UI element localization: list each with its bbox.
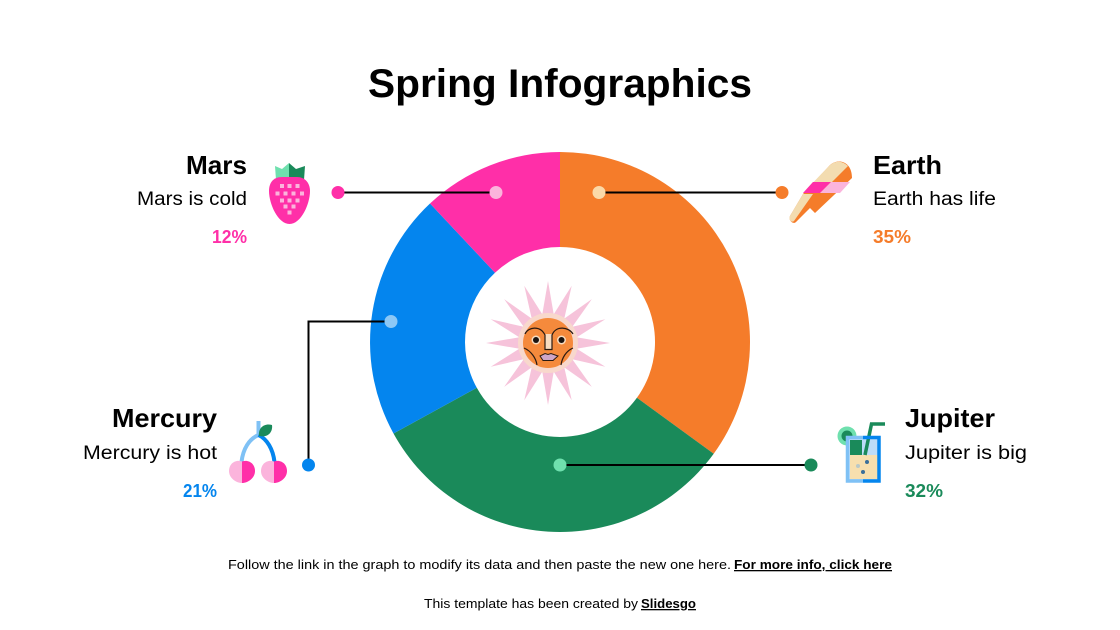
text block: Mars xyxy=(137,150,247,247)
text block: Mars: Mars xyxy=(186,150,247,180)
text block: Earth: Earth has life xyxy=(873,189,996,210)
footer note xyxy=(228,557,892,572)
connector: Earth xyxy=(592,186,788,199)
text block: Mars: 12% xyxy=(212,227,247,247)
connector: Mars xyxy=(332,186,502,199)
connector: Mercury xyxy=(302,315,398,472)
text block: Jupiter: Jupiter xyxy=(905,403,995,433)
footer note: For more info, click here xyxy=(734,557,892,572)
text block: Mercury: 21% xyxy=(183,481,217,501)
text block: Mercury: Mercury is hot xyxy=(83,443,218,464)
text block: Mercury xyxy=(83,403,218,501)
segment: Earth 35% xyxy=(560,152,750,454)
icon: drink xyxy=(838,424,885,482)
text block: Jupiter: Jupiter is big xyxy=(905,443,1027,464)
text block: Jupiter: 32% xyxy=(905,481,943,501)
segment: Mercury 21% xyxy=(370,204,495,434)
title: Spring Infographics xyxy=(368,62,752,106)
icon: cherries xyxy=(229,421,287,483)
text block: Earth: 35% xyxy=(873,227,911,247)
text block: Jupiter xyxy=(905,403,1027,501)
icon: popsicle xyxy=(789,161,852,223)
text block: Mars: Mars is cold xyxy=(137,189,247,210)
text block: Earth: Earth xyxy=(873,150,942,180)
icon: strawberry xyxy=(269,163,310,224)
connector: Jupiter xyxy=(554,458,818,472)
donut chart xyxy=(370,152,750,532)
credit line: This template has been created by xyxy=(424,596,639,611)
icon: sun face xyxy=(486,281,610,405)
segment: Mars 12% xyxy=(430,152,560,273)
footer note: Follow the link in the graph to modify its data and then paste the new one here. xyxy=(228,557,731,572)
credit line: Slidesgo xyxy=(641,596,696,611)
segment: Jupiter 32% xyxy=(394,388,714,532)
text block: Earth xyxy=(873,150,996,247)
text block: Mercury: Mercury xyxy=(112,403,218,433)
